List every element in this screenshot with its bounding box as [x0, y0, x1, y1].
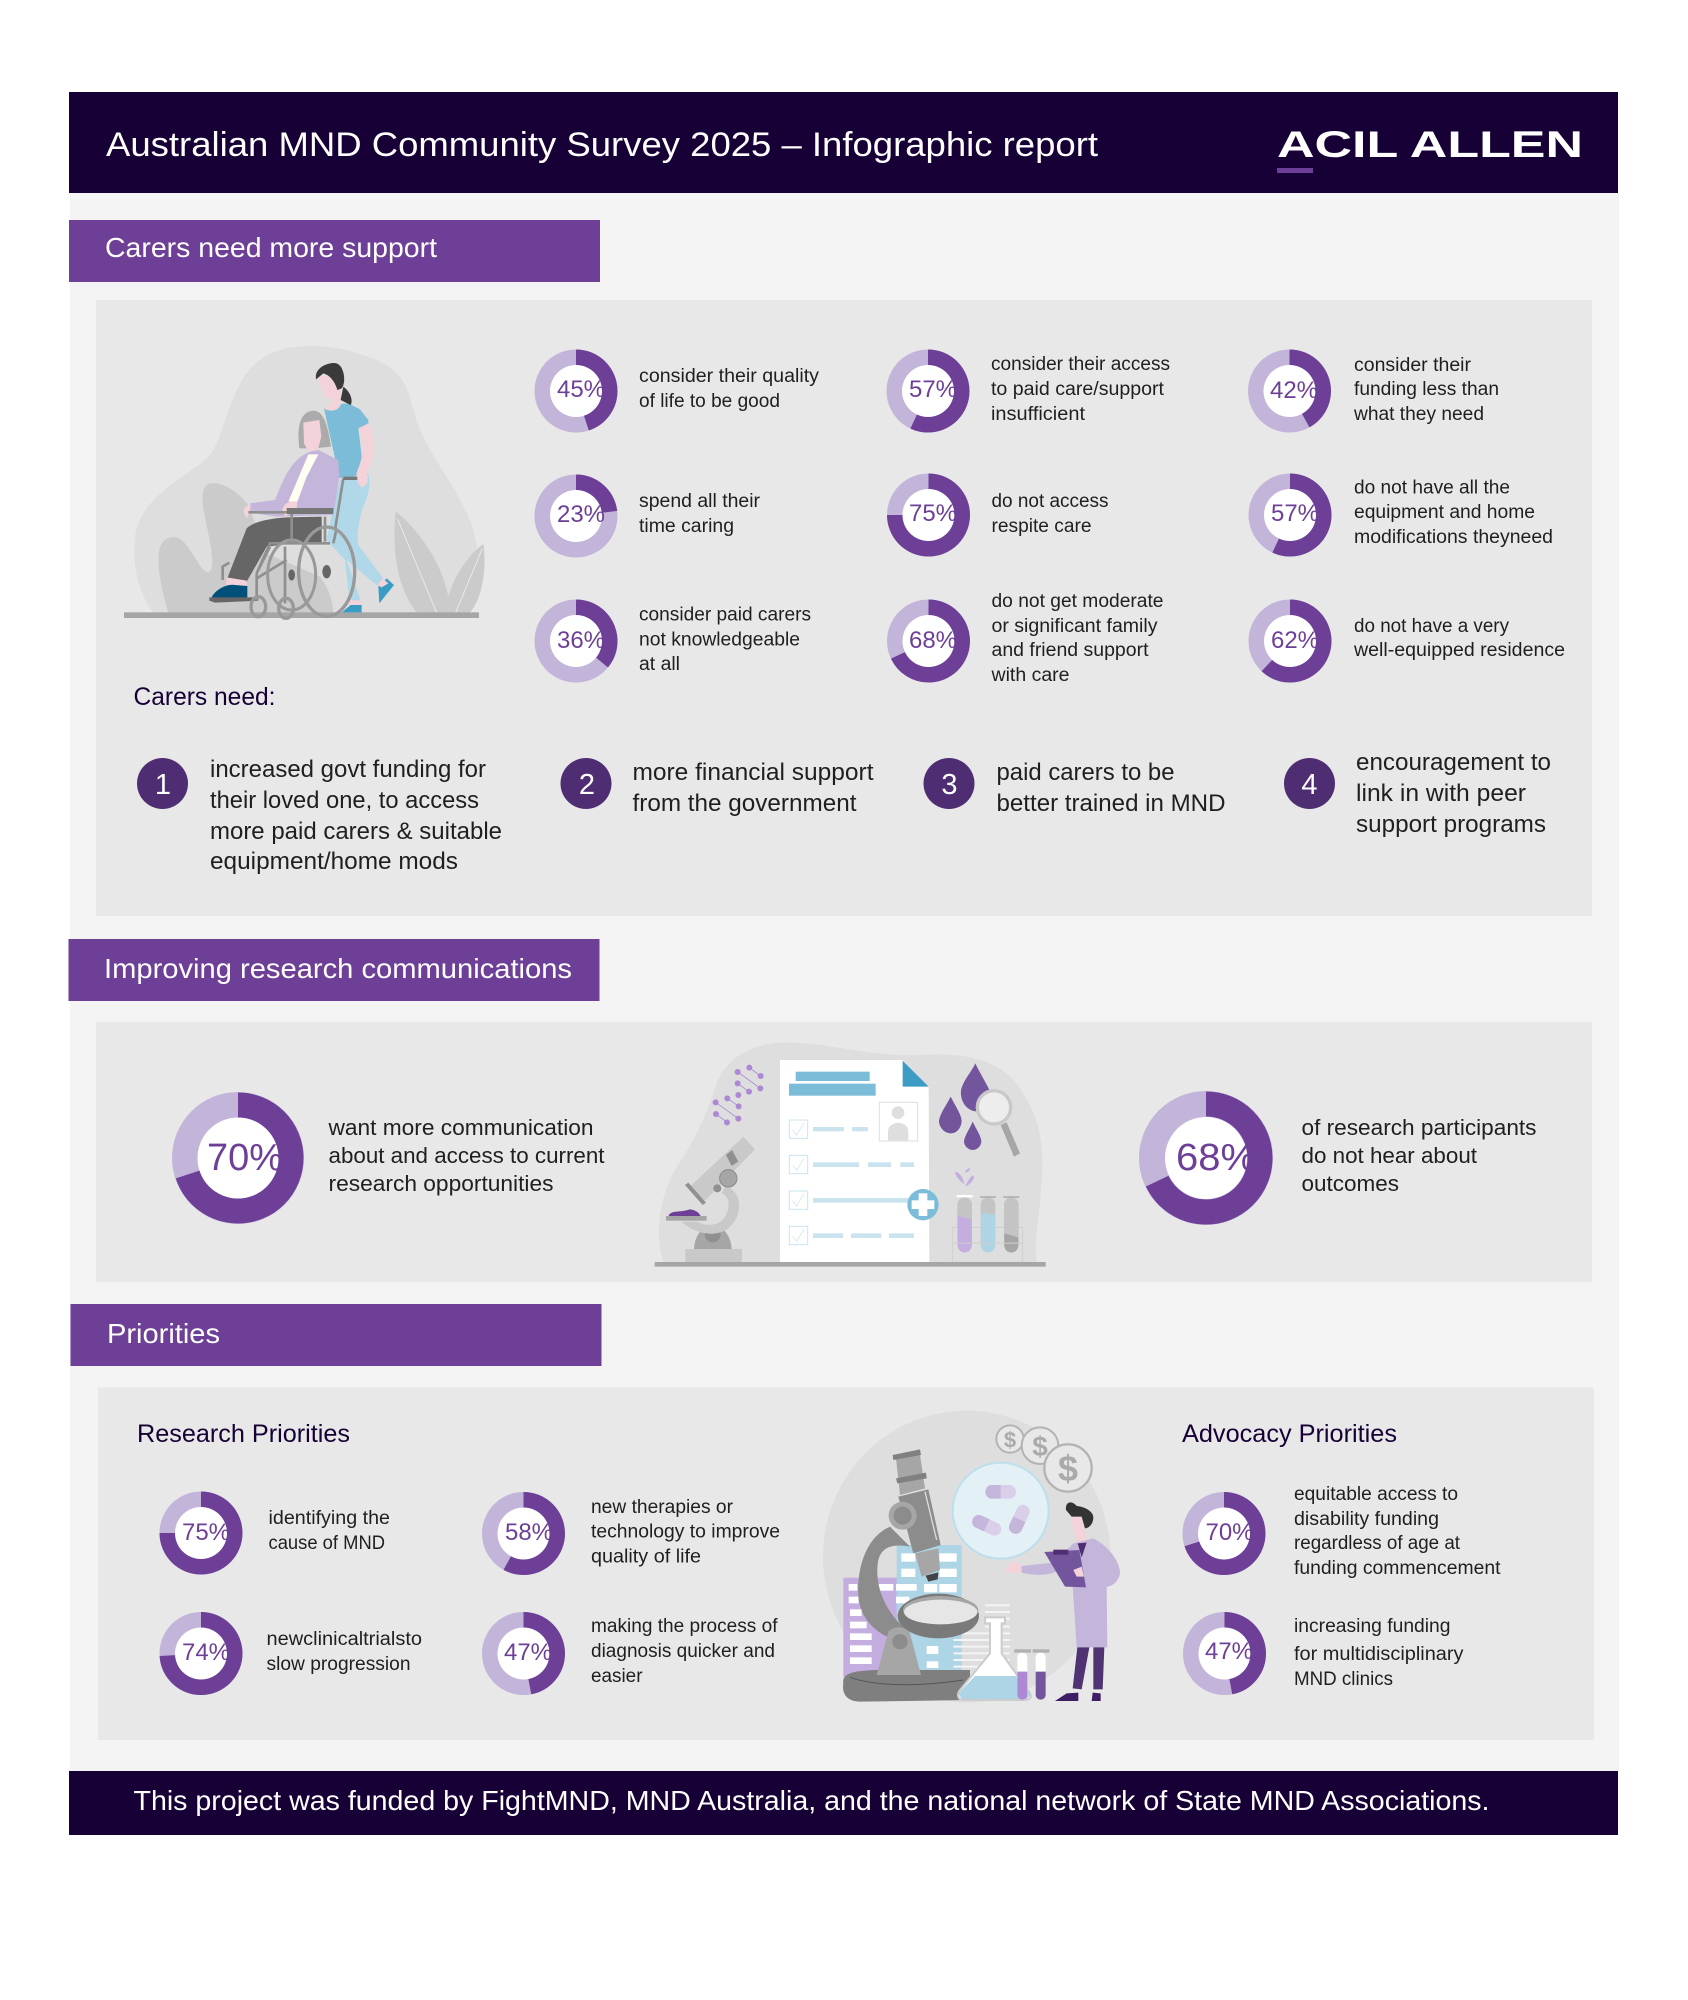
donut: 23%	[534, 474, 618, 558]
text: funding less than need: what they need	[1353, 404, 1484, 425]
need 3	[924, 758, 1226, 817]
need 3: better trained in MND	[996, 790, 1226, 817]
illustration: microscope, scientist and funding	[823, 1411, 1120, 1703]
title: Australian MND Community Survey 2025 – Infographic report	[106, 126, 1098, 164]
text: research participants	[1302, 1115, 1536, 1196]
donut: 68% outcomes	[1139, 1091, 1273, 1225]
header band	[69, 92, 1618, 193]
text: well-equipped residence: well-equipped residence	[1353, 640, 1565, 661]
text: disability funding: equitable access to	[1294, 1484, 1458, 1505]
need 2: more financial support	[632, 759, 874, 786]
text: new therapies: quality of life	[591, 1546, 701, 1568]
donut: 47% multidisciplinary clinics: 47%	[1205, 1638, 1253, 1665]
need 1: increased govt funding for	[210, 756, 486, 783]
text: want more communication: research opportunities	[328, 1171, 554, 1196]
panel: carers need more support	[96, 300, 1592, 916]
text: multidisciplinary clinics: MND clinics	[1294, 1669, 1393, 1690]
subheading: carers need: Carers need:	[134, 683, 276, 711]
illustration: microscope, scientist and funding: $	[1032, 1431, 1048, 1462]
text: want more communication: want more communication	[327, 1115, 594, 1140]
donut: 23%: 23%	[557, 501, 605, 528]
donut: 68% outcomes: 68%	[1176, 1137, 1256, 1179]
need 1: 1	[155, 769, 171, 801]
footer band	[69, 1771, 1618, 1835]
need 2: from the government	[632, 790, 857, 817]
donut: 42% funding	[1248, 350, 1331, 432]
need 3: 3	[941, 769, 958, 801]
text: time caring: time caring	[639, 516, 734, 537]
text: research participants: of research participants	[1302, 1115, 1536, 1140]
donut: 47% diagnosis: 47%	[504, 1639, 552, 1666]
donut: 36%	[534, 600, 618, 682]
panel: research communications	[96, 1022, 1592, 1282]
text: quality of life	[639, 366, 820, 412]
text: diagnosis: diagnosis quicker and	[591, 1641, 775, 1662]
panel: priorities	[98, 1388, 1594, 1740]
text: paid care access: to paid care/support	[991, 379, 1165, 400]
text: well-equipped residence: do not have a very	[1354, 616, 1509, 637]
text: funding less than need: funding less than	[1354, 379, 1499, 400]
text: time caring	[639, 491, 761, 537]
text: paid carers knowledge: at all	[639, 654, 680, 675]
donut: 45%	[534, 350, 618, 432]
text: disability funding	[1294, 1484, 1501, 1579]
donut: 68% family support: 68%	[909, 627, 957, 654]
text: family and friend support: do not get moderate	[992, 591, 1164, 612]
section heading: priorities	[70, 1304, 602, 1366]
text: family and friend support: with care	[990, 665, 1070, 686]
subheading: research priorities: Research Priorities	[137, 1420, 350, 1448]
text: respite care	[992, 491, 1108, 537]
donut: 62% residence	[1248, 600, 1332, 682]
text: paid care access: insufficient	[991, 404, 1086, 425]
need 1	[137, 756, 502, 875]
text: disability funding: regardless of age at	[1294, 1533, 1461, 1554]
text: want more communication	[327, 1115, 605, 1196]
logo: ACIL ALLEN	[1277, 124, 1583, 173]
text: disability funding: funding commencement	[1294, 1558, 1501, 1579]
text: paid carers knowledge: consider paid carers	[639, 604, 811, 626]
donut: 70% communication	[172, 1092, 304, 1224]
text: paid carers knowledge	[639, 604, 811, 675]
donut: 75% cause	[160, 1492, 242, 1574]
subheading: advocacy priorities: Advocacy Priorities	[1182, 1420, 1397, 1448]
need 3: paid carers to be	[996, 759, 1174, 786]
illustration: research document and lab	[655, 1043, 1046, 1267]
illustration: carer pushing wheelchair	[124, 346, 485, 618]
donut: 47% multidisciplinary clinics	[1183, 1612, 1266, 1695]
section heading: research communications	[68, 939, 600, 1001]
text: cause of MND: cause of MND	[268, 1533, 385, 1554]
need 4: link in with peer	[1356, 780, 1526, 807]
section heading: research communications: Improving research communications	[104, 953, 572, 984]
text: respite care: respite care	[992, 516, 1092, 537]
text: multidisciplinary clinics	[1294, 1616, 1464, 1690]
need 2: 2	[579, 769, 595, 801]
donut: 75% cause: 75%	[182, 1519, 230, 1546]
need 2	[560, 758, 874, 817]
donut: 57% equipment: 57%	[1271, 500, 1319, 527]
need 4: encouragement to	[1356, 749, 1551, 776]
text: disability funding: disability funding	[1294, 1509, 1439, 1530]
illustration: microscope, scientist and funding: $	[1004, 1428, 1016, 1453]
text: paid care access	[991, 354, 1170, 425]
text: clinical trials: slow progression	[266, 1654, 410, 1675]
donut: 57% paid care	[886, 350, 970, 432]
donut: 57% paid care: 57%	[909, 376, 957, 403]
text: equipment and home mods: equipment and home	[1354, 502, 1535, 523]
donut: 58% therapies: 58%	[505, 1519, 553, 1546]
text: multidisciplinary clinics: for multidisciplinary	[1294, 1644, 1464, 1665]
text: quality of life: consider their quality	[639, 366, 820, 387]
text: clinical trials: newclinicaltrialsto	[266, 1629, 422, 1650]
section heading: priorities: Priorities	[107, 1318, 220, 1349]
text: funding less than need: consider their	[1354, 355, 1472, 376]
text: clinical trials	[266, 1629, 422, 1675]
text: quality of life: of life to be good	[639, 391, 780, 412]
donut: 70% communication: 70%	[207, 1137, 283, 1179]
need 4	[1284, 749, 1551, 838]
need 4: 4	[1301, 769, 1318, 801]
footer band: This project was funded by FightMND, MND Australia, and the national network of State MND Associations.	[134, 1785, 1490, 1816]
text: equipment and home mods: modifications theyneed	[1354, 527, 1553, 548]
text: paid carers knowledge: not knowledgeable	[639, 630, 800, 650]
donut: 74% clinical trials: 74%	[182, 1639, 230, 1666]
text: cause of MND: identifying the	[268, 1508, 390, 1529]
text: want more communication: about and access to current	[328, 1143, 605, 1168]
text: diagnosis: making the process of	[591, 1616, 778, 1637]
donut: 70% disability funding: 70%	[1206, 1519, 1254, 1546]
text: new therapies: new therapies or	[591, 1497, 734, 1518]
text: new therapies	[591, 1497, 780, 1568]
text: multidisciplinary clinics: increasing funding	[1294, 1616, 1450, 1637]
donut: 70% disability funding	[1182, 1492, 1266, 1575]
text: research participants: do not hear about	[1302, 1143, 1478, 1168]
text: cause of MND	[268, 1508, 390, 1554]
donut: 45%: 45%	[557, 376, 605, 403]
text: family and friend support: and friend support	[992, 640, 1149, 661]
donut: 47% diagnosis	[482, 1612, 565, 1695]
text: family and friend support: or significant family	[992, 616, 1158, 637]
page background panel	[70, 192, 1619, 1772]
need 1: more paid carers & suitable	[210, 818, 502, 845]
text: paid care access: consider their access	[991, 354, 1170, 375]
text: family and friend support	[990, 591, 1164, 686]
need 1: equipment/home mods	[210, 848, 458, 875]
section heading: carers: Carers need more support	[105, 232, 437, 263]
donut: 62% residence: 62%	[1271, 627, 1319, 654]
donut: 58% therapies	[482, 1492, 565, 1575]
section heading: carers	[69, 220, 600, 282]
text: new therapies: technology to improve	[591, 1522, 780, 1542]
text: diagnosis	[591, 1616, 778, 1687]
text: well-equipped residence	[1353, 616, 1565, 661]
text: respite care: do not access	[992, 491, 1108, 512]
donut: 68% family support	[887, 600, 970, 682]
donut: 57% equipment	[1248, 474, 1332, 556]
donut: 42% funding: 42%	[1270, 377, 1318, 404]
text: equipment and home mods: do not have all the	[1354, 478, 1510, 498]
donut: 75% respite: 75%	[909, 500, 957, 527]
donut: 74% clinical trials	[160, 1612, 242, 1695]
logo: ACIL ALLEN: ACIL ALLEN	[1277, 124, 1583, 165]
need 4: support programs	[1356, 811, 1546, 838]
text: diagnosis: easier	[591, 1666, 643, 1687]
text: equipment and home mods	[1354, 478, 1553, 548]
text: research participants: outcomes	[1302, 1171, 1399, 1196]
donut: 75% respite	[887, 474, 970, 556]
donut: 36%: 36%	[557, 627, 605, 654]
illustration: microscope, scientist and funding: $	[1058, 1448, 1078, 1489]
text: funding less than need	[1353, 355, 1499, 425]
need 1: their loved one, to access	[210, 787, 479, 814]
text: time caring: spend all their	[639, 491, 761, 512]
